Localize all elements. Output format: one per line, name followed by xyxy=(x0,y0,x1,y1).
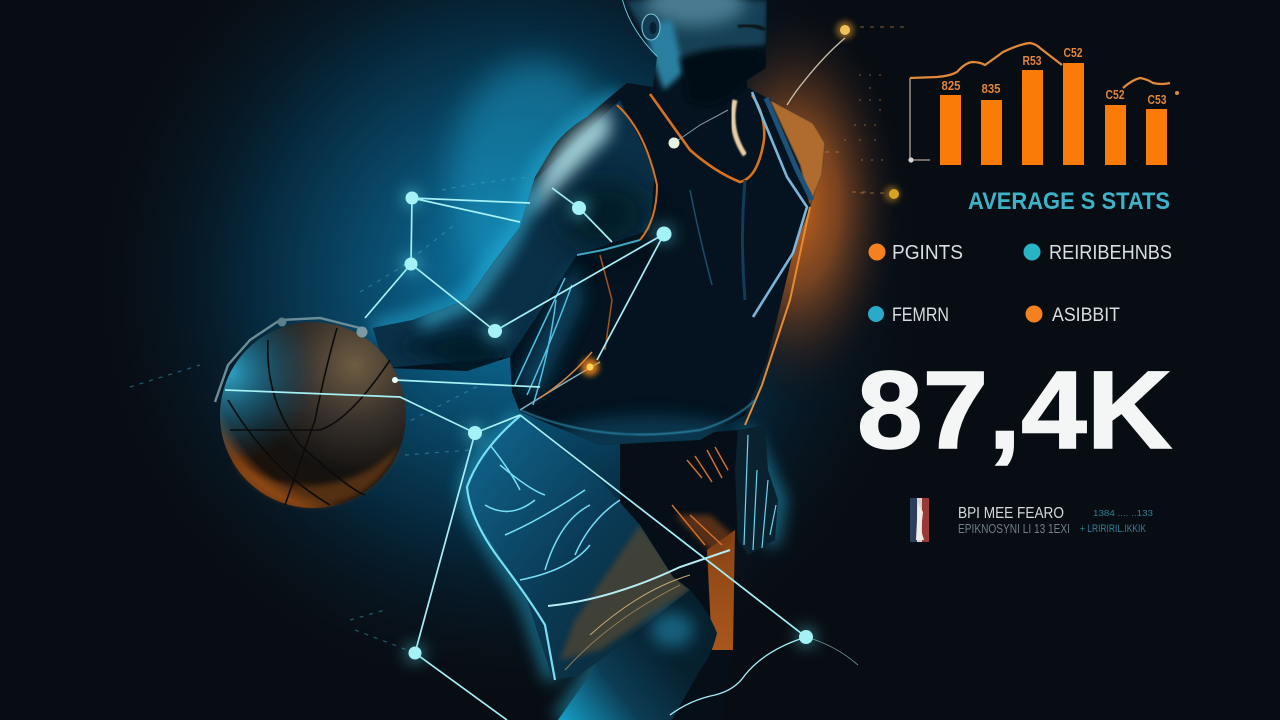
big number: 87,4K xyxy=(857,349,1172,472)
legend item: team: FEMRN xyxy=(892,305,949,326)
dot matrix behind shoulder xyxy=(844,74,883,161)
fingers on the ball xyxy=(215,318,360,402)
neck and head xyxy=(622,0,768,105)
footer text xyxy=(958,505,1154,536)
bar chart xyxy=(908,43,1179,165)
basketball xyxy=(215,318,406,510)
bar value labels xyxy=(942,46,1167,107)
orange nodes xyxy=(581,21,900,376)
bar value labels: C52 xyxy=(1106,88,1125,102)
legend item: assists: ASIBBIT xyxy=(1052,305,1120,326)
bar value labels: C53 xyxy=(1148,93,1167,107)
legend item: team xyxy=(868,305,949,326)
footer teal detail: + LRIRIRIL.IKKIK xyxy=(1080,523,1147,535)
bars xyxy=(940,63,1167,165)
trend line xyxy=(910,43,1170,88)
footer detail: EPIKNOSYNI LI 13 1EXI xyxy=(958,521,1070,536)
hanging hand xyxy=(735,425,778,555)
bar value labels: 825 xyxy=(942,79,961,93)
side torso light xyxy=(515,260,585,395)
legend item: points: PGINTS xyxy=(892,242,963,264)
legend item: assists xyxy=(1026,305,1120,326)
bar value labels: C52 xyxy=(1064,46,1083,60)
network of glowing connectors xyxy=(225,21,900,720)
jersey trim and stripes xyxy=(577,92,812,425)
legend xyxy=(868,242,1172,326)
bar value labels: 835 xyxy=(982,82,1001,96)
arm shading xyxy=(373,100,655,368)
rear leg and orange shorts xyxy=(590,430,740,720)
connector lines xyxy=(225,38,858,720)
connector nodes xyxy=(392,138,813,660)
heading: average stats: AVERAGE S STATS xyxy=(968,188,1170,215)
side jersey light strands xyxy=(515,255,612,410)
torso and arm silhouette xyxy=(360,0,840,465)
shoulder highlight xyxy=(530,108,610,215)
legend item: rebounds: REIRIBEHNBS xyxy=(1049,242,1172,264)
footer teal note: 1384 .... ..133 xyxy=(1093,509,1154,518)
figure outer glow xyxy=(373,95,778,720)
front thigh and knee xyxy=(558,590,717,720)
league logo xyxy=(910,498,929,542)
footer name: BPI MEE FEARO xyxy=(958,505,1064,522)
decorative dotted data traces xyxy=(130,27,905,653)
node halos xyxy=(402,189,815,662)
chart axis xyxy=(910,78,930,160)
belly light xyxy=(554,408,735,445)
waist band glow xyxy=(520,400,755,434)
bar value labels: R53 xyxy=(1022,54,1042,68)
shorts xyxy=(460,410,730,690)
player figure xyxy=(360,0,840,720)
right shoulder orange light xyxy=(770,100,825,205)
